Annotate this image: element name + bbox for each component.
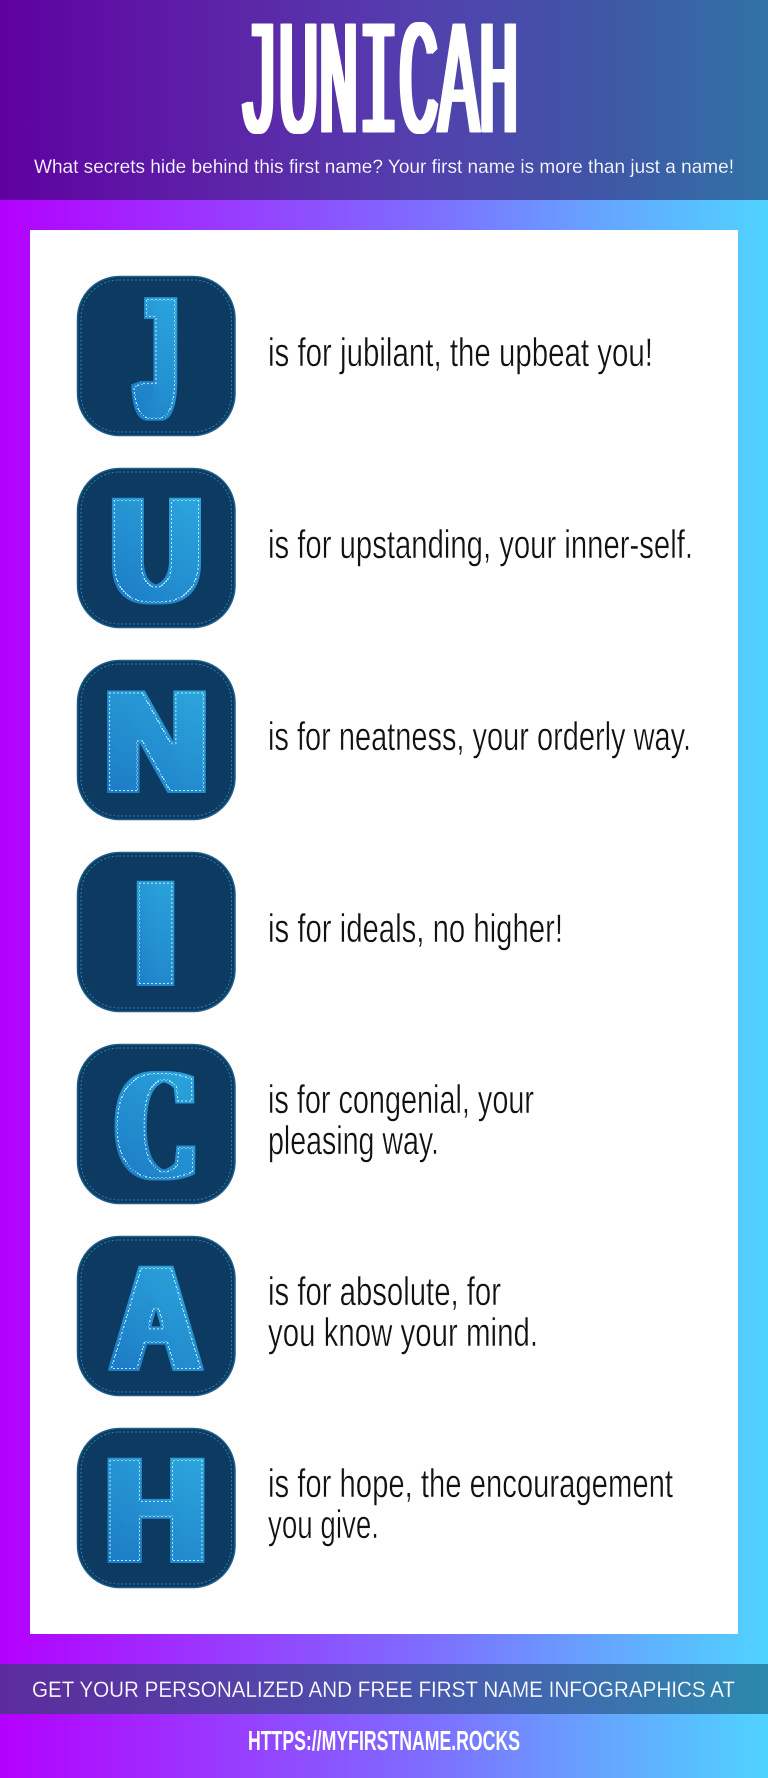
text: C lines bbox=[268, 1078, 534, 1163]
text: H lines bbox=[268, 1462, 673, 1547]
icon: letter J bbox=[78, 260, 235, 455]
text: I line: is for ideals, no higher! bbox=[268, 907, 563, 951]
row: H bbox=[78, 1426, 673, 1594]
footer url: HTTPS://MYFIRSTNAME.ROCKS bbox=[248, 1725, 520, 1756]
icon: letter C bbox=[78, 1035, 235, 1213]
icon: letter I: I bbox=[133, 850, 178, 1017]
icon: letter N bbox=[78, 660, 235, 823]
icon: letter J: J bbox=[137, 260, 175, 455]
text: A lines: you know your mind. bbox=[268, 1311, 538, 1355]
title: JUNICAH bbox=[238, 0, 519, 183]
text: C lines: pleasing way. bbox=[268, 1119, 439, 1163]
text: H lines: you give. bbox=[268, 1503, 379, 1547]
row: J bbox=[78, 260, 653, 455]
icon: letter H bbox=[78, 1426, 235, 1594]
icon: letter A: A bbox=[112, 1234, 200, 1402]
text: C lines: is for congenial, your bbox=[268, 1078, 534, 1122]
row: A bbox=[78, 1234, 538, 1402]
icon: letter C: C bbox=[116, 1035, 197, 1213]
header band bbox=[0, 0, 768, 200]
icon: letter I bbox=[78, 850, 235, 1017]
footer band bbox=[0, 1664, 768, 1714]
row: C bbox=[78, 1035, 534, 1213]
icon: letter A bbox=[78, 1234, 235, 1402]
subtitle: What secrets hide behind this first name? Your first name is more than just a name! bbox=[34, 156, 734, 178]
icon: letter U bbox=[78, 467, 235, 635]
row: N bbox=[78, 660, 691, 823]
icon: letter N: N bbox=[105, 660, 208, 823]
white content panel bbox=[30, 230, 738, 1634]
icon: letter U: U bbox=[111, 467, 202, 635]
text: A lines bbox=[268, 1270, 538, 1355]
text: A lines: is for absolute, for bbox=[268, 1270, 501, 1314]
icon: letter H: H bbox=[105, 1426, 207, 1594]
row: I bbox=[78, 850, 563, 1017]
row: U bbox=[78, 467, 693, 635]
